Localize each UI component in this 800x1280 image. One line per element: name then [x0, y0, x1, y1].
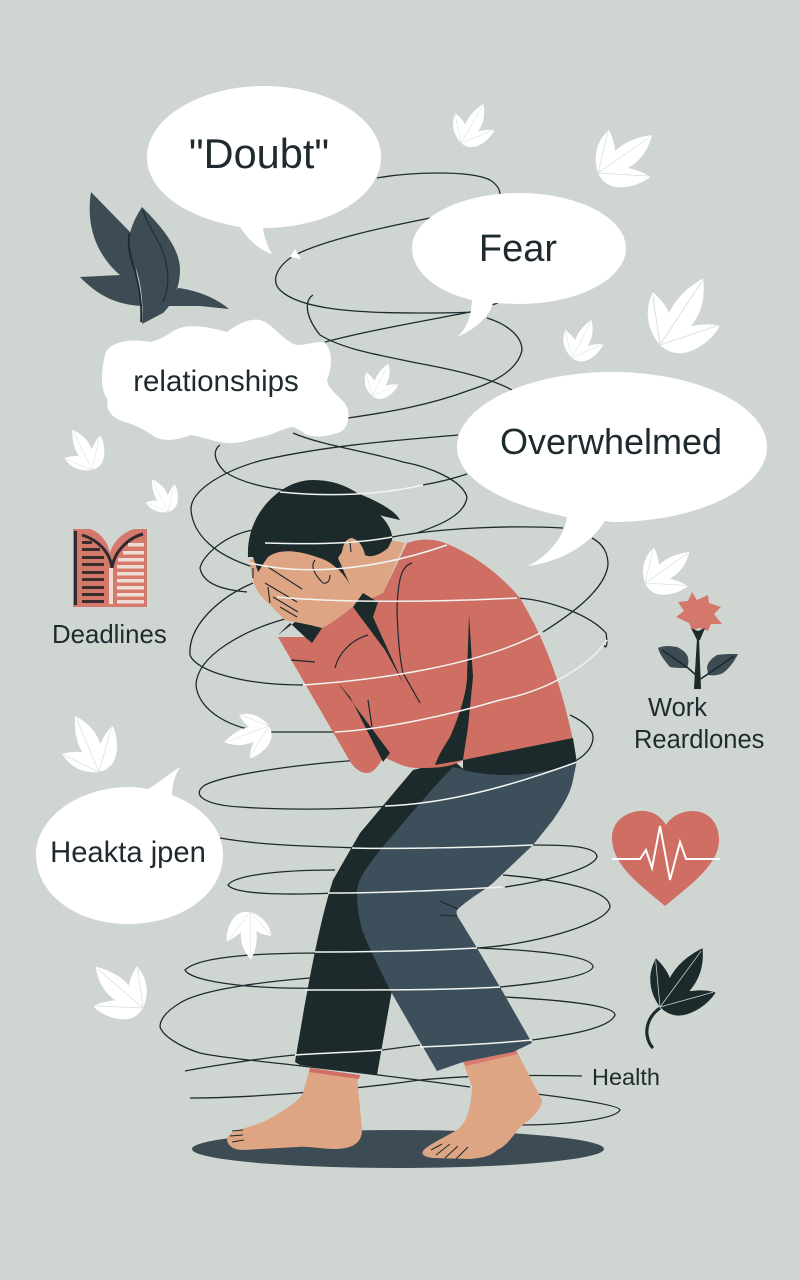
swirl lines in front of figure [250, 485, 607, 1055]
speech bubble: Doubt [147, 86, 381, 254]
speech bubble: Overwhelmed: Overwhelmed [500, 421, 722, 462]
thought cloud: relationships: relationships [133, 365, 299, 398]
right foot [422, 1048, 542, 1159]
shirt folds [353, 593, 403, 683]
thought cloud: relationships [102, 320, 348, 443]
left foot [227, 1068, 362, 1150]
icon: heart with pulse [612, 811, 720, 906]
speech bubble: Overwhelmed [457, 372, 767, 566]
icon: small white leaves [60, 101, 726, 1022]
label: Deadlines: Deadlines [52, 621, 167, 649]
ground shadow [192, 1130, 604, 1168]
ear [343, 538, 362, 564]
collar [278, 622, 322, 643]
speech bubble: Doubt: "Doubt" [189, 130, 329, 177]
speech bubble: Fear: Fear [479, 228, 557, 270]
thin shirt lines [291, 563, 420, 727]
figure: person holding face [227, 480, 577, 1159]
hair [248, 480, 400, 585]
toe lines left [230, 1130, 244, 1142]
dark trouser leg [295, 760, 470, 1075]
swirl lines behind figure [160, 173, 620, 1125]
icon: open book [73, 529, 147, 607]
icon: flower [658, 592, 738, 688]
waistband [463, 738, 577, 775]
speech bubble: Heakta jpen: Heakta jpen [50, 837, 206, 869]
knee crease [440, 901, 458, 916]
blue trouser leg [357, 760, 577, 1071]
torso and arm [278, 540, 573, 773]
label: Work Reardlones [634, 694, 764, 754]
small white chip [290, 249, 301, 259]
label: Work Reardlones: Reardlones [634, 726, 764, 754]
icon: dark leaf top left [80, 192, 229, 324]
label: Work Reardlones: Work [648, 694, 707, 722]
speech bubble: Fear [412, 193, 626, 337]
label: Health: Health [592, 1064, 660, 1090]
fingers [253, 541, 351, 617]
icon: dark leaf with stem [642, 943, 721, 1048]
neck and skin [250, 535, 405, 628]
speech bubble: Heakta jpen [36, 767, 223, 924]
toe lines right [431, 1144, 468, 1159]
